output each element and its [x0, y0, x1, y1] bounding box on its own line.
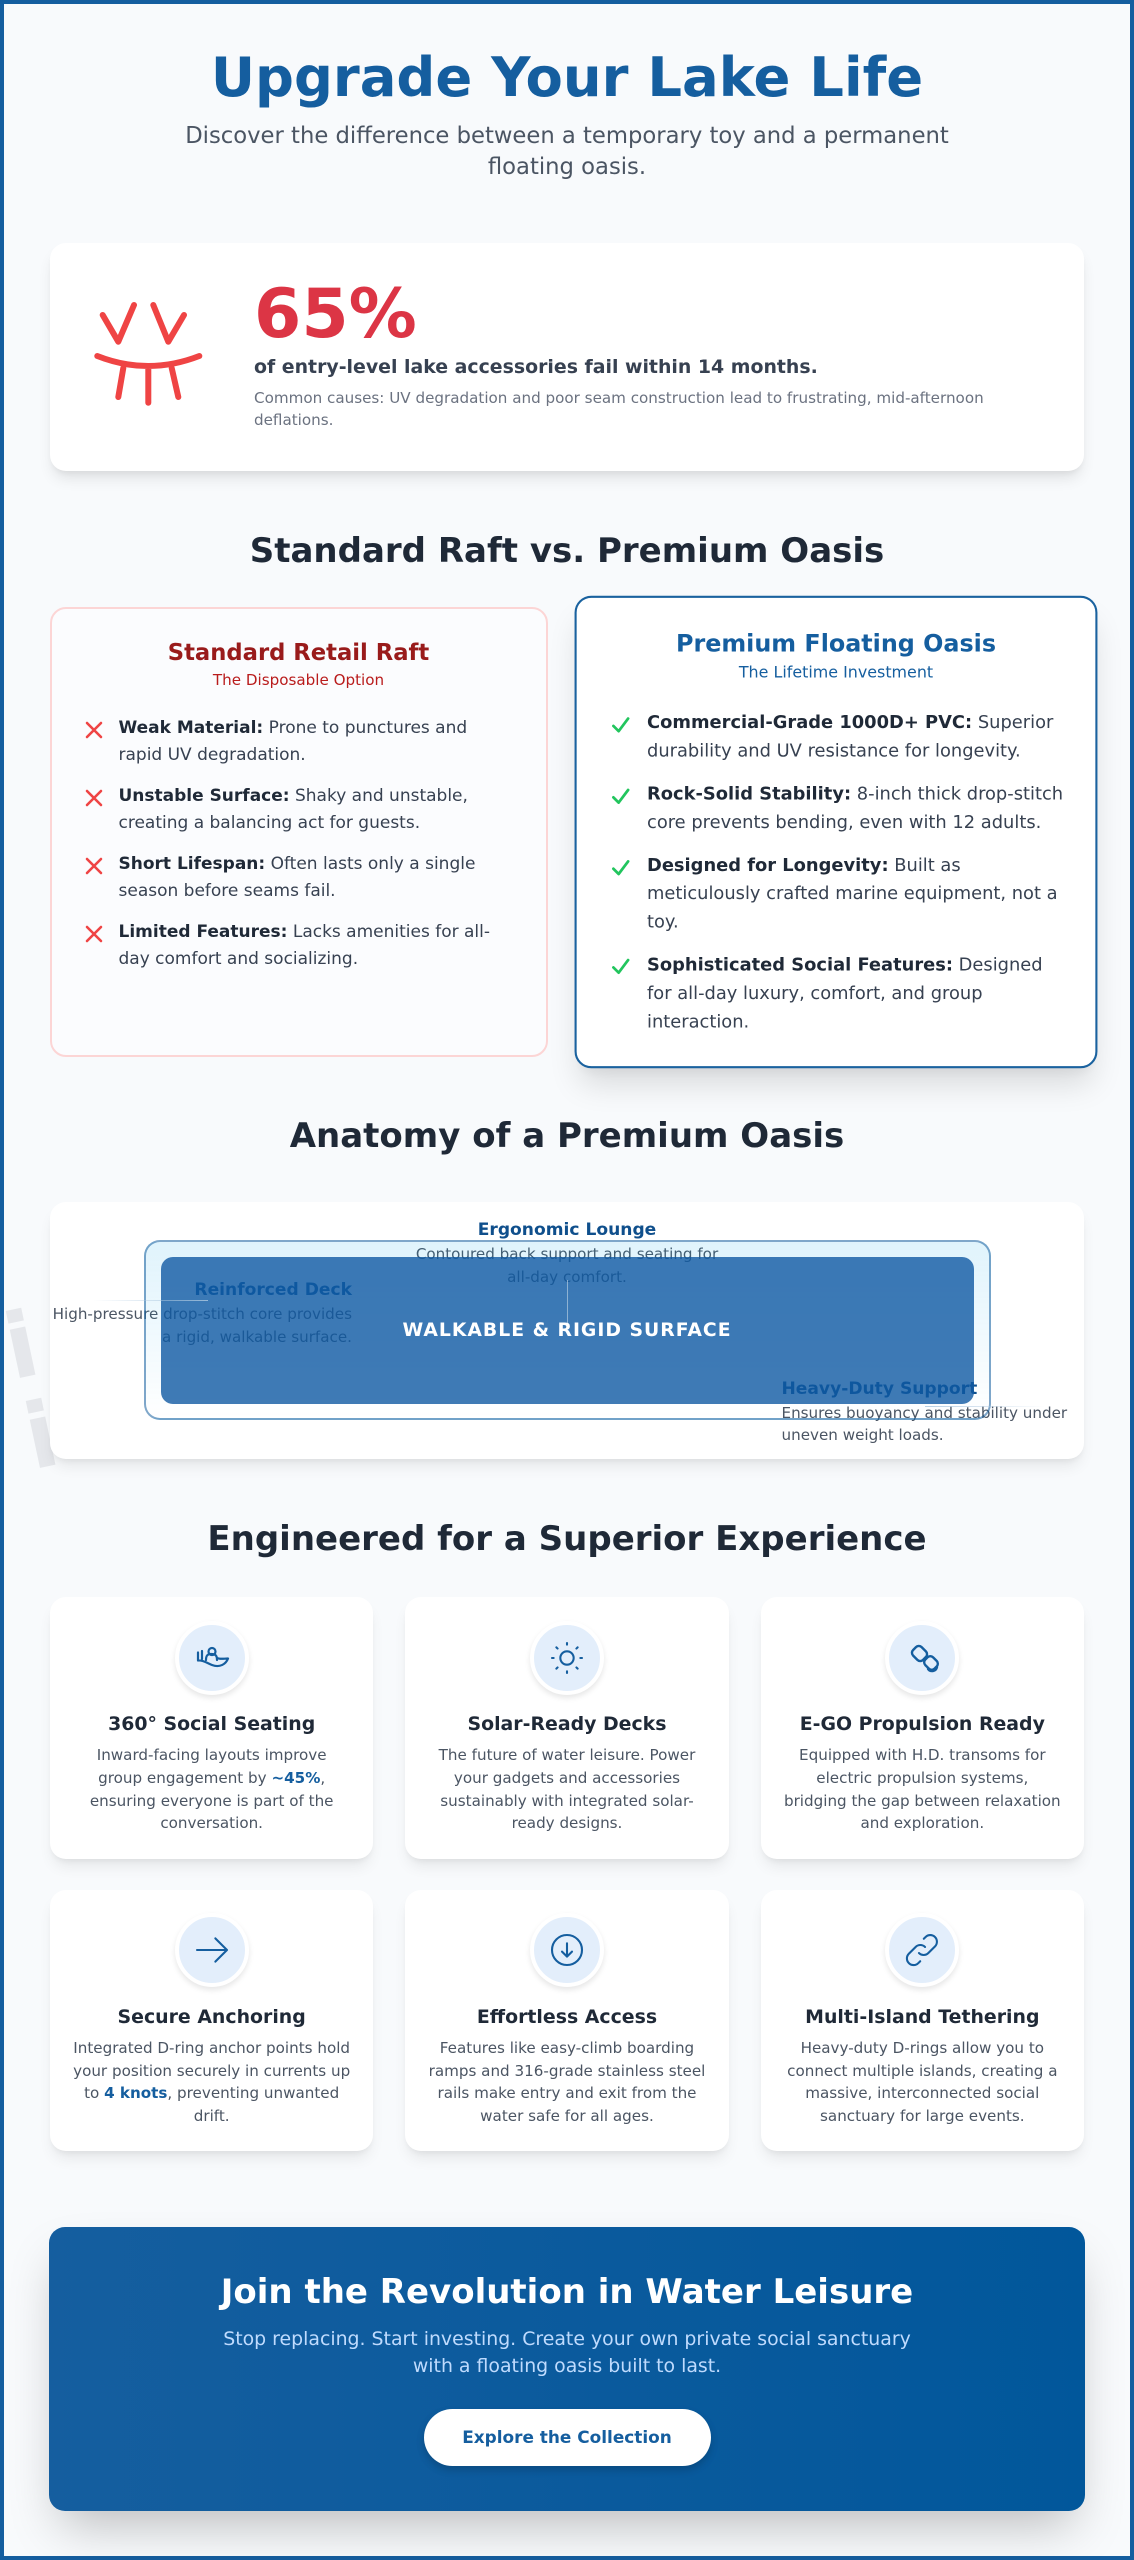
stat number: 65% [254, 275, 417, 354]
item: unstable surface: creating a balancing act for guests. [118, 813, 420, 833]
feature text: electric propulsion systems, [816, 1769, 1028, 1787]
icon: check [612, 958, 630, 974]
icon: check [612, 717, 630, 733]
heading: comparison: Standard Raft vs. Premium Oasis [250, 530, 884, 570]
feature text: Integrated D-ring anchor points hold [73, 2039, 350, 2057]
feature title: Effortless Access [477, 2006, 657, 2028]
callout text: uneven weight loads. [782, 1426, 944, 1444]
connector [567, 1280, 568, 1323]
callout text: High-pressure drop-stitch core provides [53, 1305, 352, 1323]
feature text: drift. [194, 2107, 230, 2125]
item: limited features: Limited Features: Lacks amenities for all- [118, 922, 490, 942]
feature text: connect multiple islands, creating a [787, 2062, 1058, 2080]
stat detail: deflations. [254, 411, 333, 429]
stat headline: of entry-level lake accessories fail within 14 months. [254, 356, 818, 378]
callout: ergonomic lounge [416, 1220, 718, 1286]
item: rock-solid stability [647, 784, 1063, 833]
item: rock-solid stability: core prevents bending, even with 12 adults. [647, 812, 1041, 833]
feature text: your gadgets and accessories [454, 1769, 680, 1787]
cta text: Stop replacing. Start investing. Create your own private social sanctuary [223, 2328, 911, 2350]
item: commercial-grade: Commercial-Grade 1000D+ PVC: Superior [647, 712, 1053, 733]
icon: arrow down circle [530, 1913, 604, 1987]
feature text: rails make entry and exit from the [437, 2084, 696, 2102]
feature text: massive, interconnected social [805, 2084, 1039, 2102]
panel: premium floating oasis [574, 596, 1097, 1068]
panel: failure statistic [50, 243, 1084, 471]
callout text: all-day comfort. [507, 1268, 627, 1286]
connector [925, 1406, 1045, 1407]
item: social features [647, 954, 1042, 1032]
panel: anatomy diagram [50, 1202, 1084, 1459]
item: weak material: Weak Material: Prone to punctures and [118, 718, 467, 738]
icon: check [612, 860, 630, 876]
feature text [784, 1746, 1061, 1832]
feature text [787, 2039, 1058, 2125]
feature title: 360° Social Seating [108, 1713, 315, 1735]
item: short lifespan [118, 854, 475, 901]
feature text: Heavy-duty D-rings allow you to [801, 2039, 1044, 2057]
feature text: bridging the gap between relaxation [784, 1792, 1061, 1810]
subtitle [185, 122, 949, 180]
callout title: Reinforced Deck [194, 1280, 352, 1300]
feature text: The future of water leisure. Power [439, 1746, 695, 1764]
mark: lower: i [15, 1382, 67, 1491]
feature text [90, 1746, 333, 1832]
feature card: propulsion [761, 1597, 1084, 1858]
item: weak material [118, 718, 467, 765]
subtitle: floating oasis. [488, 154, 646, 180]
stat detail: Common causes: UV degradation and poor seam construction lead to frustrating, mid-afternoon [254, 388, 984, 406]
feature text: Features like easy-climb boarding [440, 2039, 694, 2057]
feature card: anchoring [50, 1890, 373, 2151]
icon: cross [86, 858, 102, 874]
feature title: Solar-Ready Decks [468, 1713, 666, 1735]
icon: link [885, 1913, 959, 1987]
callout: reinforced deck [53, 1280, 352, 1346]
feature text: ensuring everyone is part of the [90, 1792, 333, 1810]
panel: call to action [49, 2227, 1085, 2511]
item: unstable surface: Unstable Surface: Shaky and unstable, [118, 786, 468, 806]
item: rock-solid stability: Rock-Solid Stability: 8-inch thick drop-stitch [647, 784, 1063, 805]
cta text [223, 2328, 911, 2377]
feature text: Inward-facing layouts improve [97, 1746, 327, 1764]
heading: features: Engineered for a Superior Experience [207, 1518, 927, 1558]
item: social features: Sophisticated Social Features: Designed [647, 954, 1042, 975]
panel subheading: The Lifetime Investment [738, 663, 933, 682]
decorative marks behind anatomy panel [0, 1292, 67, 1491]
feature title: E-GO Propulsion Ready [800, 1713, 1045, 1735]
callout text: Contoured back support and seating for [416, 1245, 718, 1263]
feature text: water safe for all ages. [480, 2107, 654, 2125]
heading: anatomy: Anatomy of a Premium Oasis [290, 1116, 844, 1156]
callout text [416, 1245, 718, 1286]
diagram: floating platform [144, 1240, 990, 1420]
callout text: a rigid, walkable surface. [162, 1328, 352, 1346]
item: designed for longevity: toy. [647, 912, 678, 933]
feature text: sustainably with integrated solar- [440, 1792, 694, 1810]
icon: check [612, 788, 630, 804]
feature text: Equipped with H.D. transoms for [799, 1746, 1046, 1764]
feature card: social seating [50, 1597, 373, 1858]
feature text: and exploration. [860, 1814, 984, 1832]
item: weak material: rapid UV degradation. [118, 745, 306, 765]
feature text: to 4 knots, preventing unwanted [84, 2084, 339, 2102]
item: short lifespan: season before seams fail. [118, 881, 336, 901]
feature text: your position securely in currents up [73, 2062, 350, 2080]
cta button: Explore the Collection [462, 2427, 672, 2447]
feature card: tethering [761, 1890, 1084, 2151]
feature card: access [405, 1890, 729, 2151]
item: unstable surface [118, 786, 468, 833]
feature text: ramps and 316-grade stainless steel [429, 2062, 705, 2080]
icon: cross [86, 722, 102, 738]
callout text [53, 1305, 352, 1346]
item: social features: for all-day luxury, comfort, and group [647, 983, 982, 1004]
cta button [424, 2409, 710, 2466]
item: commercial-grade [647, 712, 1054, 762]
connector [93, 1300, 208, 1301]
diagram: walkable deck [160, 1256, 974, 1404]
feature title: Multi-Island Tethering [805, 2006, 1040, 2028]
subtitle: Discover the difference between a temporary toy and a permanent [185, 122, 949, 148]
item: short lifespan: Short Lifespan: Often lasts only a single [118, 854, 475, 874]
feature text: conversation. [160, 1814, 263, 1832]
title: Upgrade Your Lake Life [211, 46, 923, 109]
item: commercial-grade: durability and UV resistance for longevity. [647, 741, 1020, 762]
item: limited features: day comfort and socializing. [118, 949, 358, 969]
panel heading: Standard Retail Raft [168, 640, 429, 666]
icon: seating [175, 1620, 249, 1694]
callout text: Ensures buoyancy and stability under [782, 1404, 1067, 1422]
callout: heavy-duty support [782, 1379, 1068, 1444]
item: social features: interaction. [647, 1011, 749, 1032]
deck label: WALKABLE & RIGID SURFACE [402, 1320, 732, 1341]
item: designed for longevity: meticulously crafted marine equipment, not a [647, 883, 1057, 904]
feature card: solar [405, 1597, 729, 1858]
icon: cross [86, 790, 102, 806]
item: designed for longevity: Designed for Longevity: Built as [647, 855, 960, 876]
cta heading: Join the Revolution in Water Leisure [221, 2272, 913, 2312]
feature title: Secure Anchoring [118, 2006, 306, 2028]
callout title: Ergonomic Lounge [478, 1220, 656, 1240]
panel heading: Premium Floating Oasis [675, 630, 996, 658]
feature text: group engagement by ~45%, [98, 1769, 325, 1787]
panel subheading: The Disposable Option [213, 671, 384, 689]
icon: arrow right [175, 1913, 249, 1987]
feature text: ready designs. [512, 1814, 622, 1832]
stat detail [254, 388, 984, 429]
item: designed for longevity [647, 855, 1057, 933]
callout title: Heavy-Duty Support [782, 1379, 977, 1399]
feature text [429, 2039, 705, 2125]
panel: standard retail raft [50, 607, 548, 1057]
feature text [438, 1746, 696, 1832]
icon: sun [530, 1620, 604, 1694]
cta text: with a floating oasis built to last. [413, 2355, 721, 2377]
icon: cross [86, 926, 102, 942]
icon: broken red seam [94, 302, 202, 406]
callout text [782, 1404, 1068, 1444]
feature text [73, 2039, 350, 2125]
icon: propulsion [885, 1620, 959, 1694]
item: limited features [118, 922, 490, 969]
feature text: sanctuary for large events. [820, 2107, 1025, 2125]
